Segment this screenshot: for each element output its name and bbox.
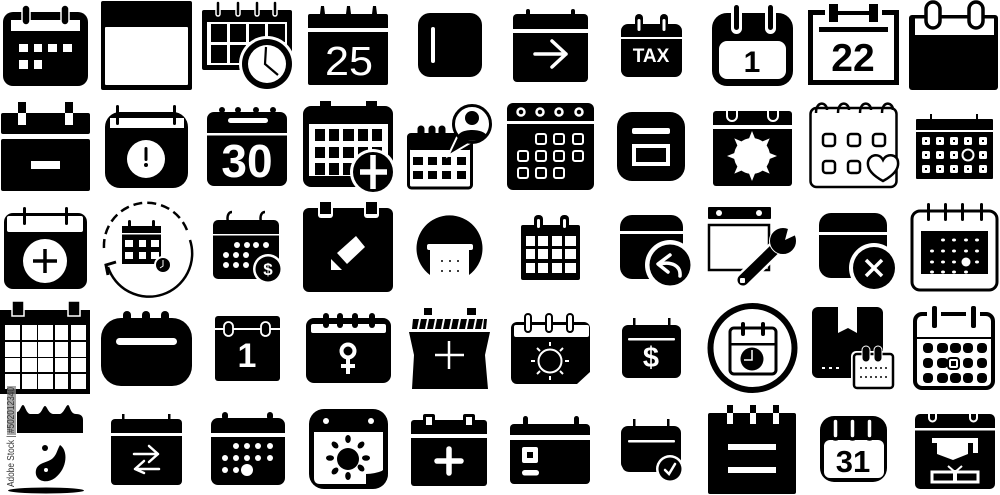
icon: calendar with yin yang [8, 405, 84, 494]
icon: calendar with female symbol [306, 313, 391, 383]
icon: calendar with dollar [622, 318, 681, 378]
icon: calendar 30 [207, 107, 287, 187]
icon: tabbed calendar with plus [409, 308, 490, 389]
icon: calendar with return arrow [620, 215, 695, 290]
icon: calendar with dollar: $ [263, 260, 273, 279]
icon: calendar with dots [211, 412, 285, 485]
icon: calendar plus [303, 101, 396, 195]
icon: calendar with swap arrows [111, 414, 182, 485]
icon: calendar number 1 with rings [215, 316, 280, 381]
icon: calendar with pencil [303, 202, 393, 292]
icon: calendar with grid of outlined squares [507, 103, 594, 190]
icon: calendar with clock [202, 1, 295, 92]
icon: recurring calendar [104, 203, 192, 297]
icon: calendar with cross [819, 213, 899, 293]
icon: calendar with check [621, 419, 684, 483]
icon: calendar 1 [712, 5, 793, 86]
icon: calendar alert [105, 105, 188, 188]
icon: calendar with graduation cap and book [915, 410, 995, 489]
icon: small calendar with highlighted day [916, 114, 993, 179]
icon: calendar with card [510, 416, 590, 484]
icon: tax calendar: TAX [633, 46, 670, 67]
icon: rounded calendar with bar [101, 311, 192, 386]
icon: calendar clock in circle [710, 306, 794, 390]
icon: calendar with wrench [708, 207, 800, 283]
icon: small grid calendar [521, 215, 580, 280]
icon: calendar arrow [513, 9, 588, 82]
watermark: Adobe Stock | #502012340 [6, 387, 17, 487]
icon: outlined calendar with dotted panel [912, 203, 997, 290]
icon: calendar with plus [411, 414, 487, 486]
icon: calendar 31: 31 [836, 444, 870, 479]
icon: rounded square with bar [418, 13, 482, 77]
icon: calendar 22: 22 [831, 37, 875, 80]
icon: notepad calendar [708, 405, 796, 494]
icon: calendar with squares [3, 5, 88, 86]
icon: calendar 30: 30 [221, 135, 273, 187]
icon: blank calendar window [101, 1, 192, 90]
icon: calendar with plus circle [4, 207, 87, 289]
icon: calendar minus [1, 102, 90, 191]
icon: circle with calendar sheet [416, 215, 482, 286]
icon: tax calendar [621, 14, 682, 77]
icon: outlined calendar with rounded cells [915, 306, 993, 388]
icon: calendar 25: 25 [325, 38, 373, 84]
icon: large grid calendar [0, 301, 90, 394]
icon: calendar page with sun [309, 409, 388, 489]
icon: calendar number 1 with rings: 1 [238, 337, 256, 375]
icon: calendar with sun and curled corner [511, 314, 590, 384]
icon: rounded window [617, 112, 685, 181]
icon: calendar with dollar: $ [643, 342, 659, 374]
icon: calendar with dollar [213, 212, 283, 284]
icon: calendar with person pin [407, 106, 490, 188]
icon: calendar black with rings [909, 2, 998, 90]
icon: calendar 31 [820, 416, 887, 482]
icon: calendar 25 [308, 6, 388, 85]
icon: calendar heart [810, 104, 898, 187]
icon: box with bookmark and calendar [812, 307, 895, 390]
icon: calendar 22 [810, 4, 896, 82]
icon: calendar 1: 1 [744, 46, 760, 79]
icon: calendar sun spiky [713, 107, 792, 186]
